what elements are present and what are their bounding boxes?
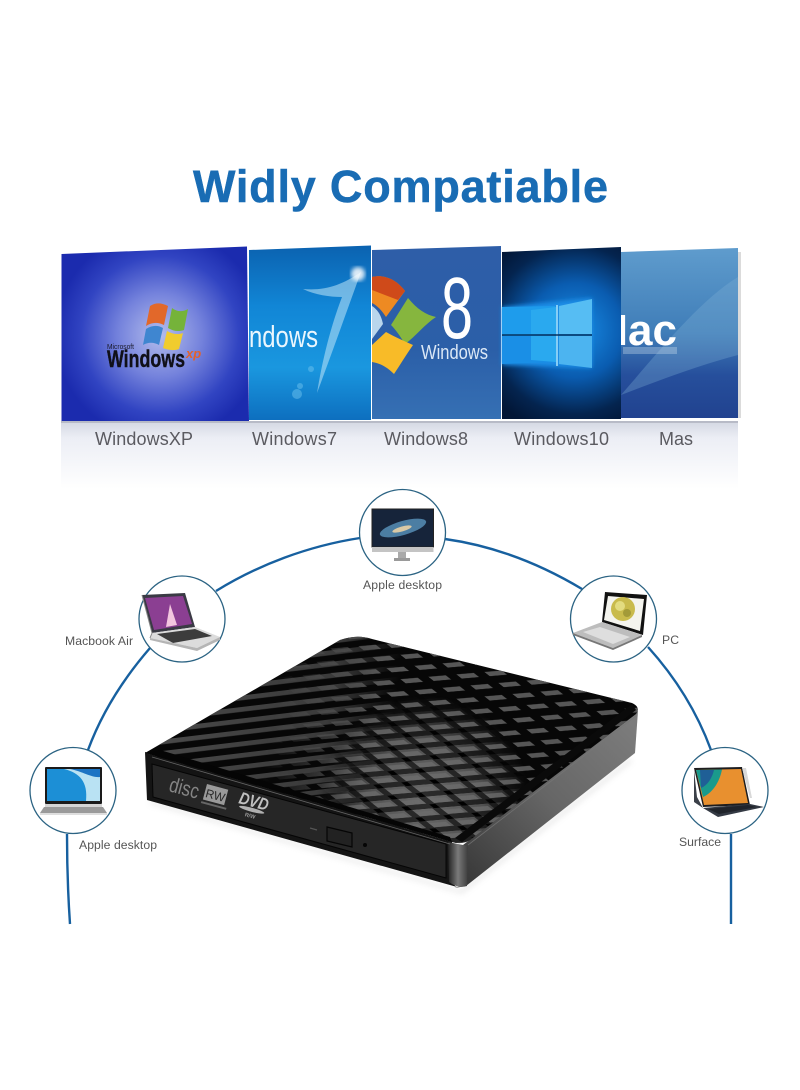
icon: Surface <box>694 767 764 817</box>
title: Widly Compatiable <box>193 161 608 212</box>
drive edge highlights <box>152 716 636 845</box>
device: Macbook Air <box>139 576 225 662</box>
pinhole <box>363 843 367 847</box>
logo: DVD: DVD <box>237 789 271 815</box>
logo: disc: disc <box>167 774 202 804</box>
panel reflections <box>61 252 741 489</box>
text: numeral 8: 8 <box>441 260 473 357</box>
device: Surface tablet <box>682 748 768 834</box>
device: Apple desktop (top) <box>360 490 446 576</box>
icon: Windows XP flag <box>143 303 188 350</box>
panel: Mac <box>621 248 738 418</box>
text reflection <box>623 347 677 354</box>
sparkle <box>351 267 365 281</box>
drive right side <box>463 711 638 886</box>
icon: Windows 8 flag <box>372 276 436 374</box>
text: Windows: Windows <box>421 342 488 364</box>
device: PC laptop <box>570 576 656 662</box>
drive tray <box>152 764 446 878</box>
drive front face <box>145 752 465 887</box>
eject button <box>327 827 352 847</box>
drive: external DVD writer <box>145 636 638 894</box>
icon: Macbook <box>142 593 220 651</box>
label: Windows8: Windows8 <box>384 429 468 449</box>
logo: DVD <box>235 789 271 823</box>
panel: Windows 10 <box>502 247 621 419</box>
text: Mac: Mac <box>591 306 677 355</box>
drive shadow <box>150 758 632 894</box>
label: Windows10: Windows10 <box>514 429 609 449</box>
icon: Windows 10 window <box>502 298 592 368</box>
connecting arcs <box>67 538 731 924</box>
text: ndows: ndows <box>249 319 318 354</box>
swoosh decoration <box>621 277 738 395</box>
icon: iMac <box>372 509 434 561</box>
text: xp: xp <box>185 346 201 361</box>
drive corner <box>448 842 468 887</box>
icon: PC laptop <box>573 592 647 650</box>
panel: Windows 7 <box>249 246 371 420</box>
panel: Windows 8 <box>372 246 501 419</box>
label: Mas: Mas <box>659 429 693 449</box>
label: PC: PC <box>662 633 679 647</box>
icon: laptop <box>40 767 107 815</box>
label: Windows7: Windows7 <box>252 429 337 449</box>
logo: DVD: R/W <box>244 812 257 821</box>
label: Apple desktop left: Apple desktop <box>79 838 157 852</box>
bubbles <box>292 366 314 399</box>
text: Microsoft: Microsoft <box>107 342 135 351</box>
panel: Windows XP <box>62 246 249 421</box>
logo: RW box: RW <box>204 786 227 805</box>
status led <box>310 828 317 830</box>
logo: RW box <box>201 784 231 810</box>
label: Macbook Air: Macbook Air <box>65 634 133 648</box>
label: WindowsXP: WindowsXP <box>95 429 193 449</box>
label: Surface: Surface <box>679 835 721 849</box>
icon: Windows 7 swoosh <box>303 272 361 393</box>
drive top surface <box>145 636 638 844</box>
text: Windows: Windows <box>107 346 185 373</box>
label: Apple desktop top: Apple desktop <box>363 578 442 592</box>
device: laptop (left) <box>30 748 116 834</box>
